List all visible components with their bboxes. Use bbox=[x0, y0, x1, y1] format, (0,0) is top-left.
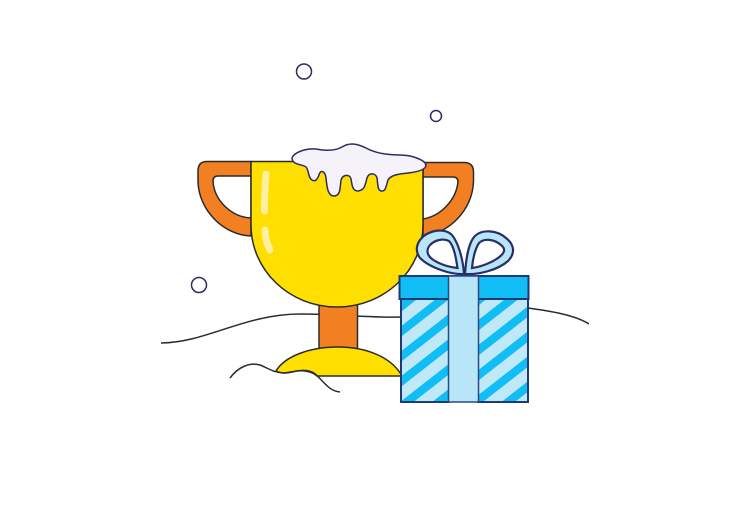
snow on cup bbox=[292, 144, 426, 196]
bow left loop bbox=[417, 230, 464, 274]
trophy stem bbox=[319, 300, 358, 350]
left handle bbox=[198, 162, 251, 236]
box lid bbox=[400, 276, 528, 299]
right handle bbox=[423, 162, 474, 236]
trophy base bbox=[276, 347, 402, 376]
bubble: right bbox=[430, 110, 442, 122]
trophy cup bbox=[251, 162, 423, 307]
bow right loop bbox=[465, 231, 513, 274]
box right panel bbox=[478, 298, 528, 402]
ribbon bbox=[448, 276, 478, 402]
bubble: left bbox=[192, 278, 206, 292]
gift box bbox=[400, 230, 528, 402]
cup highlights bbox=[264, 174, 270, 250]
trophy bbox=[198, 144, 474, 376]
snow drift line bbox=[230, 364, 340, 392]
box left panel bbox=[401, 298, 449, 402]
bubble: top bbox=[296, 64, 312, 79]
snow ground line bbox=[161, 308, 589, 343]
